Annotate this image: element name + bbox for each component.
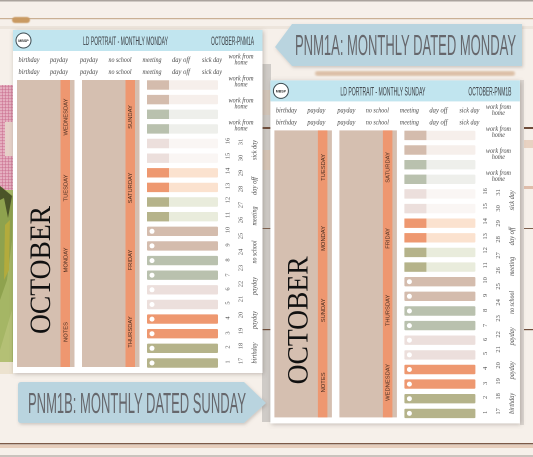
- date numbers and vertical labels: payday: [250, 276, 258, 296]
- date numbers and vertical labels: 22: [238, 281, 244, 287]
- script label rows: day off: [172, 55, 191, 64]
- month panel with OCTOBER title: NOTES: [64, 322, 70, 342]
- script label rows: work from: [486, 168, 511, 177]
- week panel: THURSDAY: [385, 295, 391, 326]
- date numbers and vertical labels: 26: [495, 266, 502, 274]
- date numbers and vertical labels: 8: [482, 309, 489, 312]
- date numbers and vertical labels: 3: [482, 382, 489, 385]
- date numbers and vertical labels: 1: [224, 360, 232, 364]
- date numbers and vertical labels: 11: [482, 262, 489, 269]
- date numbers and vertical labels: 7: [224, 273, 232, 277]
- date numbers and vertical labels: 11: [224, 212, 232, 218]
- script label rows: sick day: [202, 67, 223, 76]
- date numbers and vertical labels: 13: [224, 183, 232, 189]
- script label rows: birthday: [18, 67, 40, 76]
- script label rows: day off: [172, 67, 191, 76]
- sheet: October PNM1A monthly Monday: [13, 30, 262, 373]
- script label rows: no school: [108, 67, 132, 76]
- date numbers and vertical labels: birthday: [250, 342, 258, 364]
- date numbers and vertical labels: 26: [238, 216, 244, 223]
- date numbers and vertical labels: 4: [224, 316, 232, 320]
- date numbers and vertical labels: payday: [507, 327, 516, 346]
- date numbers and vertical labels: 7: [482, 323, 489, 327]
- date numbers and vertical labels: 29: [495, 220, 502, 227]
- script label rows: day off: [429, 117, 448, 126]
- week panel: [82, 80, 140, 367]
- date numbers and vertical labels: no school: [250, 240, 258, 264]
- date numbers and vertical labels: 9: [224, 243, 232, 247]
- script label rows: birthday: [276, 117, 297, 126]
- date numbers and vertical labels: 8: [224, 258, 232, 262]
- script label rows: home: [492, 108, 505, 117]
- sheet header bar: [13, 30, 262, 51]
- week panel: SATURDAY: [128, 173, 134, 203]
- date numbers and vertical labels: 16: [224, 137, 232, 144]
- date numbers and vertical labels: 30: [495, 205, 502, 212]
- date numbers and vertical labels: 6: [482, 337, 489, 341]
- date numbers and vertical labels: 31: [238, 139, 244, 145]
- month panel with OCTOBER title: TUESDAY: [321, 154, 327, 181]
- script label rows: no school: [108, 55, 132, 64]
- script label rows: sick day: [459, 105, 480, 114]
- script label rows: payday: [79, 67, 99, 76]
- script label rows: home: [492, 174, 505, 183]
- date numbers and vertical labels: 31: [495, 189, 502, 196]
- date numbers and vertical labels: meeting: [250, 206, 258, 226]
- month panel with OCTOBER title: TUESDAY: [64, 174, 70, 201]
- date numbers and vertical labels: no school: [507, 291, 516, 314]
- date numbers and vertical labels: 4: [482, 366, 489, 370]
- script label rows: birthday: [18, 55, 40, 64]
- date numbers and vertical labels: 23: [495, 315, 502, 322]
- week panel: SUNDAY: [128, 105, 134, 129]
- date numbers and vertical labels: [224, 137, 258, 364]
- date numbers and vertical labels: 17: [495, 407, 502, 415]
- script label rows: work from: [228, 52, 254, 60]
- month panel with OCTOBER title: OCTOBER: [24, 206, 57, 334]
- script label rows: work from: [486, 124, 511, 133]
- script label rows: meeting: [400, 105, 419, 114]
- date numbers and vertical labels: 2: [482, 396, 489, 399]
- date numbers and vertical labels: 27: [238, 201, 244, 208]
- date numbers and vertical labels: 1: [482, 411, 489, 414]
- date numbers and vertical labels: 25: [238, 233, 244, 239]
- script label rows: meeting: [142, 67, 162, 76]
- script label rows: payday: [307, 105, 326, 114]
- script label rows: [18, 52, 254, 132]
- week panel: WEDNESDAY: [385, 364, 391, 401]
- month panel with OCTOBER title: [274, 130, 332, 417]
- date numbers and vertical labels: 21: [238, 296, 244, 302]
- dotted tab stickers: [404, 277, 475, 418]
- date numbers and vertical labels: day off: [250, 176, 258, 195]
- script label rows: payday: [337, 105, 356, 114]
- date numbers and vertical labels: 21: [495, 346, 502, 353]
- month panel with OCTOBER title: MONDAY: [64, 247, 70, 273]
- date numbers and vertical labels: 12: [224, 197, 232, 203]
- date numbers and vertical labels: 6: [224, 287, 232, 291]
- banner: PNM1B monthly dated Sunday: [18, 382, 266, 423]
- month panel with OCTOBER title: WEDNESDAY: [64, 98, 70, 135]
- script label rows: meeting: [142, 55, 162, 64]
- two-tone tab stickers: [404, 131, 475, 272]
- week panel: SATURDAY: [385, 152, 391, 183]
- date numbers and vertical labels: 22: [495, 331, 502, 338]
- date numbers and vertical labels: 23: [238, 265, 244, 271]
- script label rows: work from: [228, 74, 254, 82]
- sheet header bar: OCTOBER-PNM1A: [211, 36, 254, 48]
- date numbers and vertical labels: [482, 187, 516, 415]
- script label rows: no school: [366, 105, 389, 114]
- sheet header bar: MBSP: [18, 39, 29, 43]
- script label rows: work from: [486, 102, 511, 111]
- sheet header bar: MBSP: [276, 89, 287, 93]
- week panel: FRIDAY: [385, 228, 391, 249]
- week panel: THURSDAY: [128, 316, 134, 348]
- date numbers and vertical labels: 17: [238, 357, 244, 364]
- date numbers and vertical labels: 14: [224, 167, 232, 174]
- script label rows: home: [492, 152, 505, 161]
- date numbers and vertical labels: 10: [482, 277, 489, 284]
- month panel with OCTOBER title: MONDAY: [321, 226, 327, 251]
- month panel with OCTOBER title: NOTES: [321, 372, 327, 392]
- month panel with OCTOBER title: SUNDAY: [321, 298, 327, 322]
- date numbers and vertical labels: 27: [495, 251, 502, 259]
- script label rows: home: [234, 58, 248, 66]
- date numbers and vertical labels: 18: [238, 343, 244, 349]
- date numbers and vertical labels: 28: [238, 186, 244, 192]
- date numbers and vertical labels: 10: [224, 227, 232, 233]
- date numbers and vertical labels: 19: [238, 328, 244, 334]
- date numbers and vertical labels: 18: [495, 393, 502, 400]
- script label rows: payday: [79, 55, 99, 64]
- month panel with OCTOBER title: OCTOBER: [281, 256, 314, 384]
- date numbers and vertical labels: 28: [495, 236, 502, 243]
- script label rows: no school: [366, 117, 389, 126]
- date numbers and vertical labels: day off: [507, 227, 516, 245]
- date numbers and vertical labels: 16: [482, 187, 489, 195]
- week panel: FRIDAY: [128, 249, 134, 270]
- script label rows: sick day: [459, 117, 480, 126]
- script label rows: [276, 102, 511, 183]
- infographic canvas: PNM1B: MONTHLY DATED SUNDAY: [28, 388, 246, 420]
- script label rows: home: [492, 130, 505, 139]
- dotted tab stickers: [147, 227, 218, 368]
- sheet: October PNM1B monthly Sunday: [270, 80, 520, 423]
- script label rows: payday: [49, 55, 69, 64]
- date numbers and vertical labels: 20: [495, 362, 502, 369]
- date numbers and vertical labels: payday: [250, 310, 258, 330]
- date numbers and vertical labels: 30: [238, 155, 244, 161]
- script label rows: payday: [307, 117, 326, 126]
- date numbers and vertical labels: 9: [482, 294, 489, 297]
- script label rows: sick day: [202, 55, 223, 64]
- date numbers and vertical labels: 5: [482, 352, 489, 355]
- week panel: [339, 130, 397, 417]
- date numbers and vertical labels: 12: [482, 247, 489, 254]
- flowers and leaves at left edge: [0, 85, 13, 374]
- script label rows: birthday: [276, 105, 297, 114]
- date numbers and vertical labels: sick day: [250, 139, 258, 160]
- date numbers and vertical labels: 20: [238, 312, 244, 318]
- banner: PNM1A monthly dated Monday: [275, 24, 522, 66]
- script label rows: home: [234, 124, 248, 132]
- script label rows: work from: [228, 96, 254, 104]
- script label rows: work from: [228, 118, 254, 126]
- date numbers and vertical labels: meeting: [507, 257, 516, 276]
- date numbers and vertical labels: 5: [224, 301, 232, 305]
- date numbers and vertical labels: 24: [495, 298, 502, 306]
- sheet header bar: LD PORTRAIT - MONTHLY SUNDAY: [340, 86, 426, 98]
- script label rows: work from: [486, 146, 511, 155]
- sheet header bar: LD PORTRAIT - MONTHLY MONDAY: [83, 36, 168, 48]
- date numbers and vertical labels: 15: [224, 153, 232, 159]
- script label rows: payday: [49, 67, 69, 76]
- date numbers and vertical labels: 14: [482, 217, 489, 225]
- date numbers and vertical labels: sick day: [507, 190, 516, 210]
- date numbers and vertical labels: 29: [238, 170, 244, 176]
- sheet header bar: [270, 80, 520, 101]
- date numbers and vertical labels: 3: [224, 331, 232, 335]
- date numbers and vertical labels: 2: [224, 345, 232, 349]
- script label rows: meeting: [400, 117, 419, 126]
- date numbers and vertical labels: 15: [482, 203, 489, 210]
- script label rows: home: [234, 102, 248, 110]
- date numbers and vertical labels: payday: [507, 361, 516, 380]
- date numbers and vertical labels: 19: [495, 378, 502, 385]
- date numbers and vertical labels: 24: [238, 248, 244, 255]
- script label rows: day off: [429, 105, 448, 114]
- date numbers and vertical labels: birthday: [507, 392, 516, 414]
- script label rows: home: [234, 80, 248, 88]
- date numbers and vertical labels: 25: [495, 283, 502, 290]
- two-tone tab stickers: [147, 80, 218, 221]
- month panel with OCTOBER title: [17, 80, 74, 367]
- script label rows: payday: [337, 117, 356, 126]
- date numbers and vertical labels: 13: [482, 233, 489, 240]
